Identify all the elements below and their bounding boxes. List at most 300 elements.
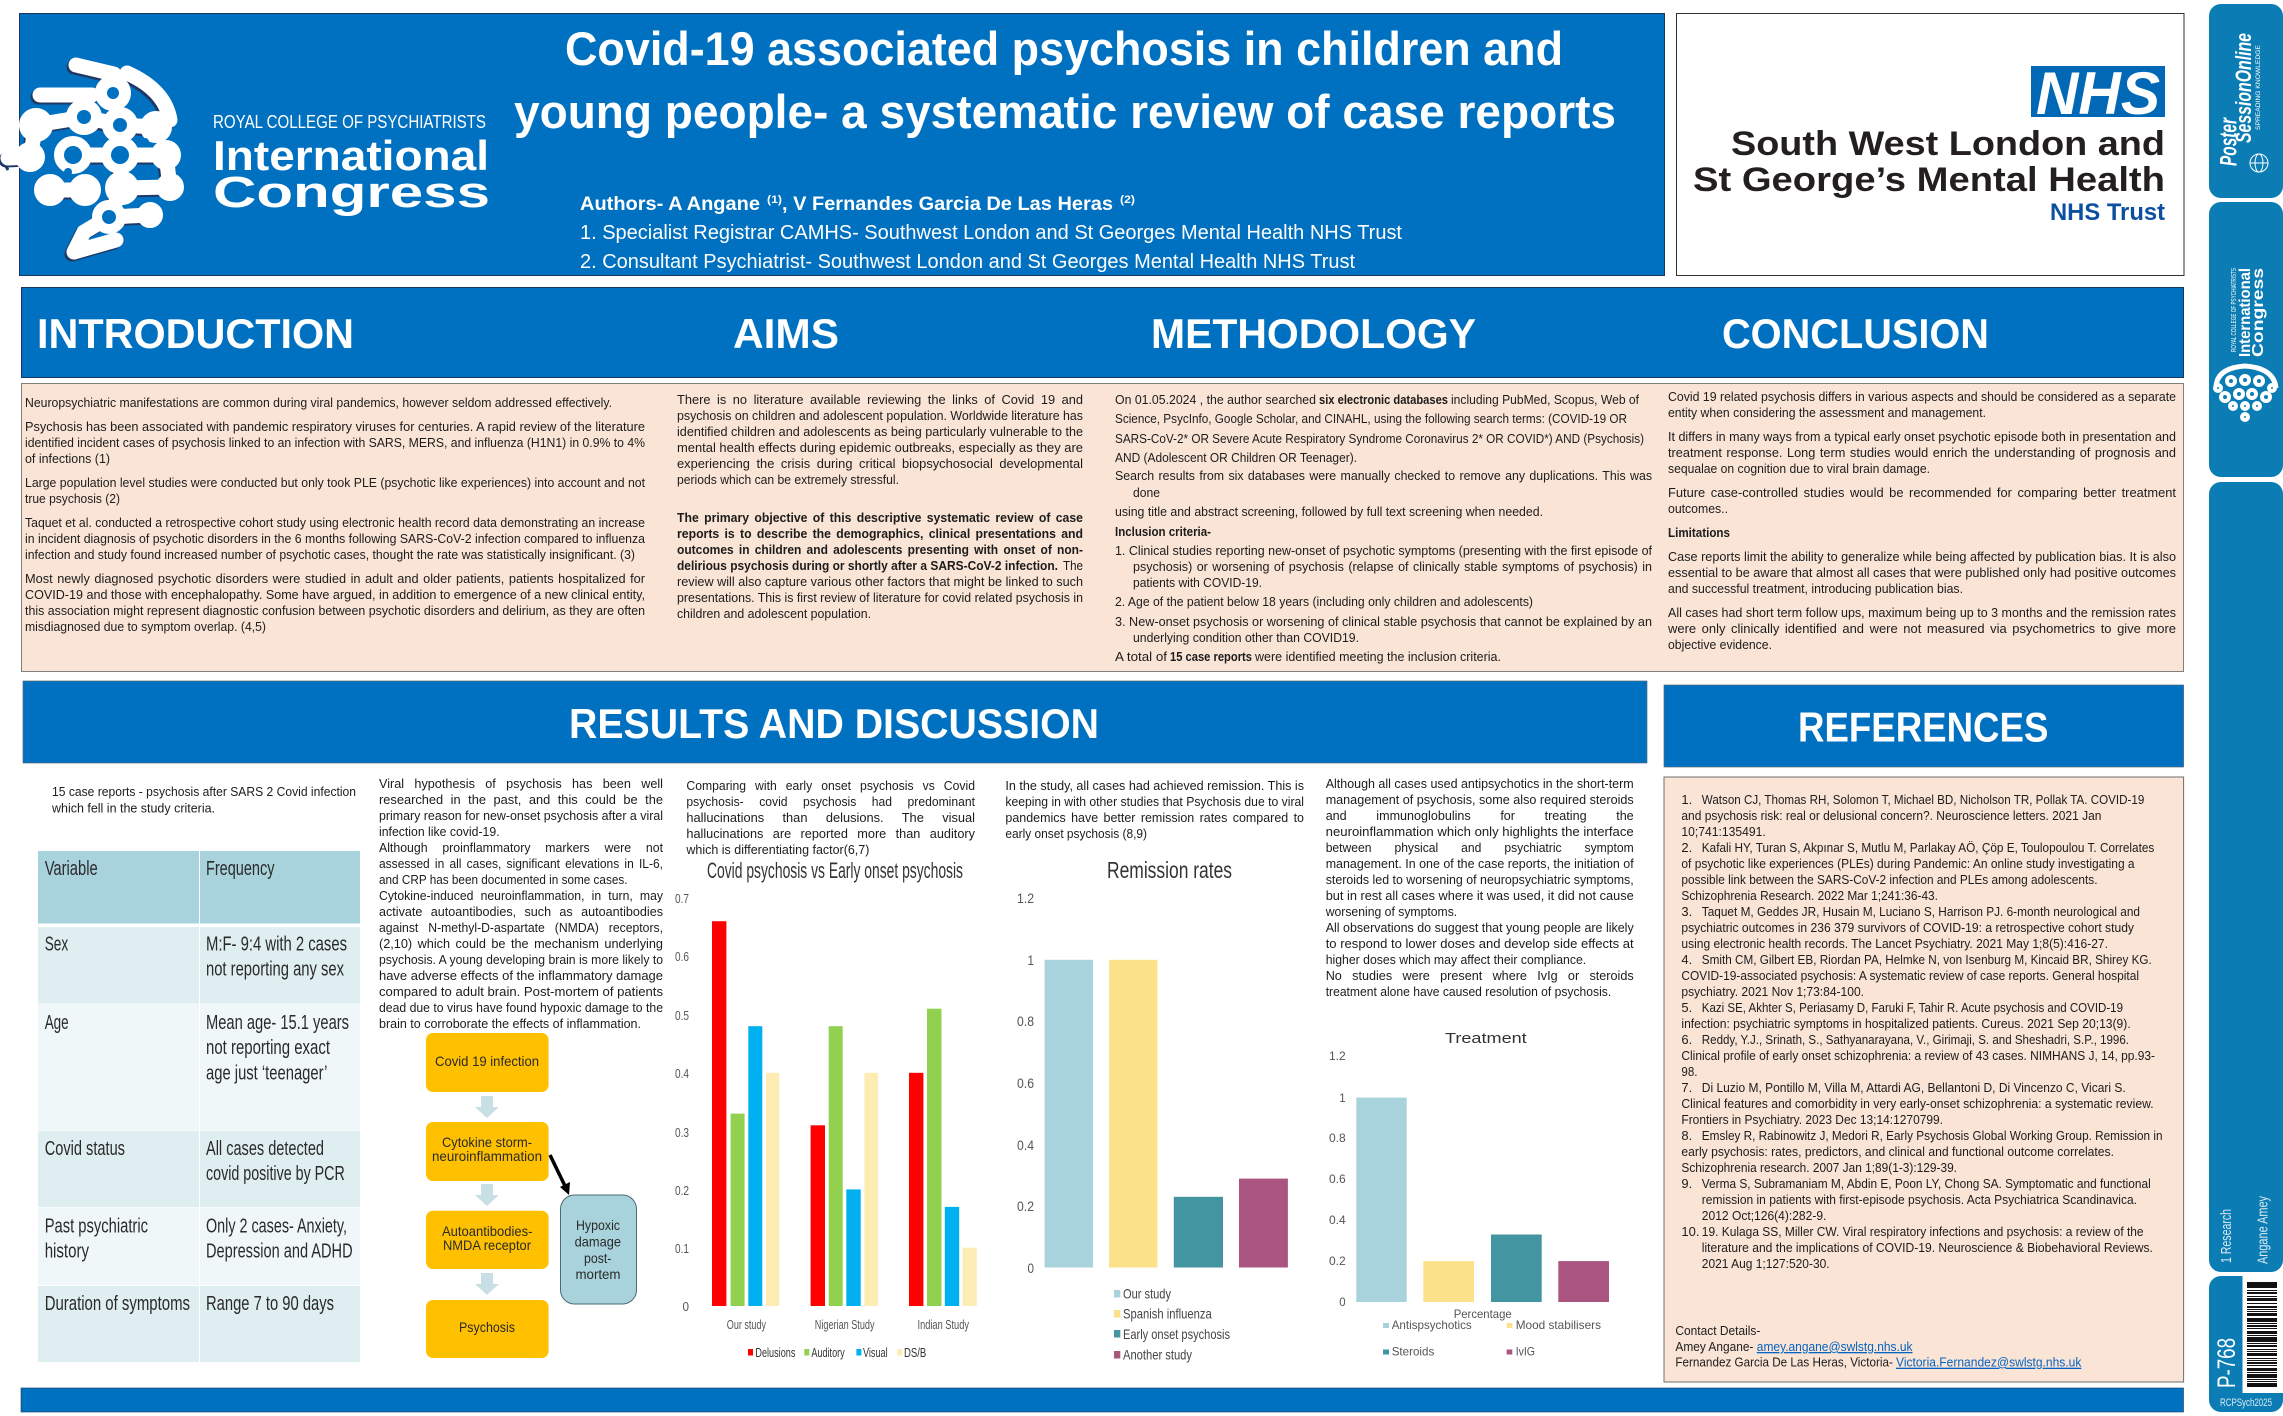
reference list: 3. [1681, 904, 1692, 919]
text: aims: experiencing the crisis during critical biopsychosocial developmental [677, 456, 1083, 471]
table: variable and frequency: Mean age- 15.1 years [206, 1012, 349, 1034]
rotated brand text: SPREADING KNOWLEDGE [2256, 45, 2262, 130]
reference list: Di Luzio M, Pontillo M, Villa M, Attardi AG, Bellantoni D, Di Vincenzo C, Vicari S. [1702, 1080, 2126, 1095]
text: introduction: in incident diagnosis of psychotic disorders in the 6 months following SARS-CoV-2 infection compared to influenza [25, 531, 646, 546]
text: aims: review will also capture various other factors that might be linked to such [677, 574, 1083, 589]
text: remission: pandemics have better remission rates compared to [1005, 810, 1304, 825]
reference list: of psychotic like experiences (PLEs) during Pandemic: An online study investigating a [1681, 856, 2135, 871]
heading bar: results and discussion [23, 681, 1647, 763]
text: viral hypothesis: activate autoantibodies, such as autoantibodies [379, 904, 663, 919]
text: treatment discussion: Although all cases used antipsychotics in the short-term [1326, 776, 1634, 791]
y axis labels: 0.7 [675, 891, 689, 906]
reference list: remission in patients with first-episode psychosis. Acta Psychiatrica Scandinavica. [1702, 1192, 2137, 1207]
text: introduction: this association might represent diagnostic confusion between psychotic disorders and delirium, as they are often [25, 603, 645, 618]
affiliations: 2. Consultant Psychiatrist- Southwest London and St Georges Mental Health NHS Trust [580, 251, 1355, 273]
text: aims: outcomes in children and adolescents presenting with onset of non- [677, 542, 1083, 557]
text: methodology: 2. Age of the patient below 18 years (including only children and adolescents) [1115, 594, 1533, 609]
text: methodology [1115, 392, 1652, 664]
heading bar: references: REFERENCES [1798, 704, 2048, 750]
reference list: Kafali HY, Turan S, Akpınar S, Mutlu M, Parlakay AÖ, Çöp E, Toulopoulou T. Correlates [1702, 840, 2155, 855]
trust name: St George’s Mental Health [1693, 161, 2165, 199]
heading: conclusion: CONCLUSION [1722, 310, 1989, 357]
text: aims: periods which can be extremely stressful. [677, 472, 899, 487]
section heading bar [22, 288, 2184, 378]
text: methodology: On 01.05.2024 , the author searched [1115, 392, 1316, 407]
legend: Spanish influenza [1123, 1306, 1212, 1322]
text: introduction: Most newly diagnosed psychotic disorders were studied in adult and older patients, patients hospitalized for [25, 571, 646, 586]
chart title: Remission rates [1107, 857, 1232, 883]
y axis labels: 1.2 [1329, 1049, 1346, 1063]
contact details: Contact Details- [1675, 1323, 1760, 1338]
legend: Antispsychotics [1392, 1318, 1472, 1332]
box: autoantibodies: Autoantibodies- [442, 1223, 533, 1239]
text: remission: In the study, all cases had achieved remission. This is [1005, 778, 1304, 793]
text: aims: mental health effects during epidemic outbreaks, especially as they are [677, 440, 1083, 455]
legend: Delusions [755, 1345, 796, 1360]
reference list: Taquet M, Geddes JR, Husain M, Luciano S, Harrison PJ. 6-month neurological and [1702, 904, 2140, 919]
reference list: Emsley R, Rabinowitz J, Medori R, Early Psychosis Global Working Group. Remission in [1702, 1128, 2162, 1143]
text: methodology: 3. New-onset psychosis or worsening of clinical stable psychosis that cannot be explained by an [1115, 614, 1652, 629]
reference list: Smith CM, Gilbert EB, Riordan PA, Helmke N, von Isenburg M, Kincaid BR, Shirey KG. [1702, 952, 2152, 967]
reference list: 1. [1681, 792, 1692, 807]
reference list: Schizophrenia research. 2007 Jan 1;89(1-3):129-39. [1681, 1160, 1957, 1175]
y axis labels: 0.8 [1329, 1131, 1346, 1145]
text: introduction: infection and study found increased number of psychotic cases, thought the rate was statistically insignificant. (3) [25, 547, 635, 562]
reference list: psychiatric outcomes in 236 379 survivors of COVID-19: a retrospective cohort study [1681, 920, 2134, 935]
arrow: cytokine to hypoxic damage [550, 1155, 570, 1195]
text: conclusion: sequalae on cognition due to viral brain damage. [1668, 461, 1930, 476]
text: introduction: Large population level studies were conducted but only took PLE (psychotic like experiences) into account and not [25, 475, 645, 490]
table: variable and frequency: All cases detected [206, 1138, 324, 1160]
box: psychosis [426, 1300, 549, 1358]
table: variable and frequency: not reporting exact [206, 1037, 330, 1059]
bars: indian study [909, 1009, 977, 1306]
legend: Mood stabilisers [1516, 1318, 1601, 1332]
rotated brand text: ROYAL COLLEGE OF PSYCHIATRISTS [2231, 268, 2238, 352]
text: conclusion: Future case-controlled studies would be recommended for comparing better treatment [1668, 485, 2176, 500]
legend: Steroids [1392, 1344, 1434, 1358]
arrow: infection to cytokine [475, 1096, 499, 1118]
text: remission: keeping in with other studies that Psychosis due to viral [1005, 794, 1304, 809]
text: introduction: COVID-19 and those with encephalopathy. Some have argued, in addition to emergence of a new clinical entity, [25, 587, 645, 602]
text: viral hypothesis: researched in the past, and this could be the [379, 792, 663, 807]
text: treatment discussion: and immunoglobulins for treating the [1326, 808, 1634, 823]
text: viral hypothesis: Cytokine-induced neuroinflammation, in turn, may [379, 888, 663, 903]
y axis labels: 0.2 [675, 1183, 689, 1198]
table: variable and frequency: Variable [45, 858, 98, 880]
authors: , V Fernandes Garcia De Las Heras [782, 194, 1113, 215]
legend: IvIG [1516, 1344, 1535, 1358]
box: covid 19 infection: Covid 19 infection [435, 1053, 539, 1069]
rotated brand text [2216, 33, 2262, 166]
authors: Authors- A Angane [580, 194, 760, 215]
chart title: Covid psychosis vs Early onset psychosis [707, 858, 963, 883]
box: cytokine storm: Cytokine storm- [442, 1134, 532, 1150]
x axis labels: Indian Study [918, 1317, 969, 1332]
reference list: 10. [1681, 1224, 1699, 1239]
title [514, 22, 1616, 138]
sidebar: international congress tab [2209, 202, 2283, 477]
legend: DS/B [904, 1345, 926, 1360]
text: introduction: Neuropsychiatric manifestations are common during viral pandemics, however seldom addressed effectively. [25, 395, 612, 410]
reference list: 2021 Aug 1;127:520-30. [1702, 1256, 1830, 1271]
logo text: International Congress: ROYAL COLLEGE OF PSYCHIATRISTS [213, 112, 486, 132]
reference list: 7. [1681, 1080, 1692, 1095]
text: conclusion: It differs in many ways from a typical early onset psychotic episode both in presentation and [1668, 429, 2176, 444]
table: variable and frequency [38, 851, 360, 1362]
reference list: early psychosis: rates, predictors, and clinical and functional outcome correlates. [1681, 1144, 2114, 1159]
y axis labels: 0.4 [1017, 1137, 1034, 1153]
y axis labels: 0.5 [675, 1008, 689, 1023]
reference list: Frontiers in Psychiatry. 2023 Dec 13;14:1270799. [1681, 1112, 1943, 1127]
legend [748, 1345, 926, 1360]
category text: 1 Research [2218, 1209, 2235, 1263]
heading bar: references [1664, 685, 2184, 767]
box: psychosis: Psychosis [459, 1319, 515, 1335]
y axis labels: 0.6 [1017, 1075, 1034, 1091]
rotated brand text: International [2237, 268, 2254, 357]
text: viral hypothesis: Although proinflammatory markers were not [379, 840, 663, 855]
reference list: 10;741:135491. [1681, 824, 1766, 839]
y axis labels [675, 891, 689, 1314]
sidebar: poster session online tab [2209, 4, 2283, 198]
text: comparing with early onset psychosis: Comparing with early onset psychosis vs Covid [686, 778, 975, 793]
table: variable and frequency: Duration of symptoms [45, 1293, 190, 1315]
text: viral hypothesis [379, 776, 663, 1031]
text: aims: The primary objective of this descriptive systematic review of case [677, 510, 1083, 525]
text: aims: identified children and adolescents as being particularly vulnerable to the [677, 424, 1083, 439]
text: aims: There is no literature available reviewing the links of Covid 19 and [677, 392, 1083, 407]
reference list: 2. [1681, 840, 1692, 855]
reference list: infection: psychiatric symptoms in hospitalized patients. Cureus. 2021 Sep 20;13(9). [1681, 1016, 2131, 1031]
contact details: Amey Angane- [1675, 1339, 1753, 1354]
logo text: International Congress: Congress [213, 168, 490, 217]
reference list: COVID-19-associated psychosis: A systematic review of case reports. General hospital [1681, 968, 2139, 983]
text: viral hypothesis: (2,10) which could be the mechanism underlying [379, 936, 663, 951]
text: conclusion: Limitations [1668, 525, 1730, 540]
table: variable and frequency: Sex [45, 934, 68, 956]
text: methodology: AND (Adolescent OR Children OR Teenager). [1115, 450, 1357, 465]
text: aims: psychosis on children and adolescent population. Worldwide literature has [677, 408, 1083, 423]
reference list: Watson CJ, Thomas RH, Solomon T, Michael BD, Nicholson TR, Pollak TA. COVID-19 [1702, 792, 2144, 807]
legend: Another study [1123, 1346, 1192, 1362]
authors: (2) [1120, 194, 1135, 206]
reference list: Schizophrenia Research. 2022 Mar 1;241:36-43. [1681, 888, 1938, 903]
text: methodology: were identified meeting the inclusion criteria. [1254, 649, 1501, 664]
logo text: International Congress [213, 112, 490, 217]
box: covid 19 infection [426, 1033, 549, 1092]
text: treatment discussion: worsening of symptoms. [1325, 904, 1457, 919]
text: methodology: psychosis) or worsening of psychosis (relapse of clinically stable symptoms of psychosis) in [1133, 559, 1652, 574]
text: introduction: Psychosis has been associated with pandemic respiratory viruses for centuries. A rapid review of the literature [25, 419, 645, 434]
reference list: Clinical features and comorbidity in very early-onset schizophrenia: a systematic review. [1681, 1096, 2154, 1111]
y axis labels: 0 [682, 1299, 689, 1314]
chart title: Treatment [1445, 1030, 1528, 1047]
reference list [1681, 792, 2162, 1271]
text: conclusion: were only clinically identified and were not measured via psychometrics to give more [1667, 621, 2176, 636]
text: viral hypothesis: infection like covid-19. [379, 824, 500, 839]
text: introduction: misdiagnosed due to symptom overlap. (4,5) [25, 619, 266, 634]
text: methodology: 1. Clinical studies reporting new-onset of psychotic symptoms (presenting with the first episode of [1115, 543, 1652, 558]
text: aims: delirious psychosis during or shortly after a SARS-CoV-2 infection. [677, 558, 1058, 573]
contact details [1675, 1323, 2082, 1370]
sidebar: author and category tab [2209, 482, 2283, 1272]
text: aims: children and adolescent population. [677, 606, 871, 621]
arrow: autoantibodies to psychosis [475, 1273, 499, 1295]
text: aims [677, 392, 1083, 621]
y axis labels: 1 [1339, 1091, 1346, 1105]
contact details: Victoria.Fernandez@swlstg.nhs.uk [1896, 1355, 2082, 1370]
bar chart: treatment [1329, 1030, 1609, 1358]
trust name [1693, 125, 2165, 226]
contact details: amey.angane@swlstg.nhs.uk [1757, 1339, 1913, 1354]
box: hypoxic damage: mortem [576, 1266, 620, 1282]
icon: globe [2250, 154, 2268, 172]
text: treatment discussion: between physical and psychiatric symptom [1326, 840, 1634, 855]
text: introduction: of infections (1) [25, 451, 110, 466]
panel: NHS trust logo [1676, 14, 2184, 276]
table: variable and frequency: Depression and ADHD [206, 1241, 353, 1263]
legend: Our study [1123, 1286, 1171, 1302]
text: conclusion: and successful treatment, introducing publication bias. [1668, 581, 1963, 596]
y axis labels: 0.3 [675, 1125, 689, 1140]
legend: Early onset psychosis [1123, 1326, 1230, 1342]
reference list: Clinical profile of early onset schizophrenia: a review of 43 cases. NIMHANS J, 14, pp.93- [1681, 1048, 2155, 1063]
text: treatment discussion: but in rest all cases where it was used, it did not cause [1326, 888, 1634, 903]
text: introduction [25, 395, 646, 634]
table: variable and frequency: Range 7 to 90 days [206, 1293, 334, 1315]
reference list: 5. [1681, 1000, 1692, 1015]
table: variable and frequency: Past psychiatric [45, 1216, 148, 1238]
table: variable and frequency: Age [45, 1012, 69, 1034]
text: comparing with early onset psychosis [685, 778, 975, 857]
rotated brand text: Congress [2250, 268, 2267, 357]
text: methodology: Search results from six databases were manually checked to remove any duplications. This was [1115, 468, 1652, 483]
box: autoantibodies: NMDA receptor [443, 1237, 531, 1253]
table: variable and frequency: history [45, 1241, 89, 1263]
legend [1114, 1286, 1230, 1362]
table: variable and frequency: Covid status [45, 1138, 125, 1160]
x axis labels: Our study [727, 1317, 766, 1332]
text: methodology: SARS-CoV-2* OR Severe Acute Respiratory Syndrome Coronavirus 2* OR COVID*) AND (Psychosis) [1115, 431, 1644, 446]
footer bar [21, 1388, 2184, 1412]
legend: Visual [863, 1345, 888, 1360]
text: remission [1005, 778, 1304, 841]
heading: introduction: INTRODUCTION [37, 310, 354, 357]
text: treatment discussion: No studies were present where IvIg or steroids [1326, 968, 1634, 983]
bars [1045, 960, 1288, 1268]
text: aims: The [1063, 558, 1083, 573]
reference list: Kazi SE, Akhter S, Periasamy D, Faruki F, Tahir R. Acute psychosis and COVID-19 [1702, 1000, 2123, 1015]
barcode [2247, 1282, 2277, 1387]
poster number: P-768 [2213, 1338, 2241, 1388]
icon: NHS lozenge: NHS [2036, 60, 2160, 127]
legend: Auditory [811, 1345, 845, 1360]
text: aims: reports is to describe the demographics, clinical presentations and [677, 526, 1083, 541]
y axis labels [1329, 1049, 1346, 1309]
reference list: 2012 Oct;126(4):282-9. [1702, 1208, 1826, 1223]
text: viral hypothesis: Viral hypothesis of psychosis has been well [379, 776, 663, 791]
heading: aims: AIMS [733, 310, 839, 357]
authors: (1) [767, 194, 782, 206]
text: methodology: patients with COVID-19. [1133, 575, 1262, 590]
y axis labels: 0.4 [1329, 1213, 1346, 1227]
text: viral hypothesis: have adverse effects of the inflammatory damage [379, 968, 663, 983]
text: methodology: A total of [1115, 649, 1167, 664]
text: viral hypothesis: primary reason for new-onset psychosis after a viral [379, 808, 663, 823]
text: introduction: identified incident cases of psychosis linked to an infection with SARS, MERS, and influenza (H1N1) in 0.9% to 4% [25, 435, 645, 450]
y axis labels: 0.1 [675, 1241, 689, 1256]
text: methodology: six electronic databases [1319, 392, 1448, 407]
text: methodology: Inclusion criteria- [1115, 524, 1211, 539]
reference list: 9. [1681, 1176, 1692, 1191]
text: treatment discussion: management. In one of the case reports, the initiation of [1326, 856, 1634, 871]
reference list: possible link between the SARS-CoV-2 infection and PLEs among adolescents. [1681, 872, 2098, 887]
text: comparing with early onset psychosis: psychosis- covid psychosis had predominant [686, 794, 975, 809]
arrow: cytokine to autoantibodies [475, 1184, 499, 1206]
text: treatment discussion: All observations do suggest that young people are likely [1326, 920, 1634, 935]
rotated brand text [2231, 268, 2267, 357]
intro note: 15 case reports: which fell in the study criteria. [51, 801, 215, 816]
y axis labels: 1.2 [1017, 890, 1034, 906]
text: methodology: using title and abstract screening, followed by full text screening when needed. [1115, 504, 1543, 519]
rotated brand text: Poster [2216, 117, 2242, 166]
text: introduction: true psychosis (2) [25, 491, 120, 506]
y axis labels [1017, 890, 1034, 1276]
y axis labels: 0 [1339, 1295, 1346, 1309]
trust name: South West London and [1731, 125, 2165, 163]
bar chart: covid psychosis vs early onset psychosis [675, 858, 977, 1360]
box: hypoxic damage: damage [575, 1234, 621, 1250]
affiliations [580, 222, 1402, 273]
panel: peach text panel [22, 384, 2184, 672]
trust name: NHS Trust [2050, 199, 2165, 226]
table: variable and frequency: not reporting any sex [206, 959, 344, 981]
sidebar: poster id tab [2209, 1276, 2283, 1412]
text: treatment discussion: to respond to lower doses and develop side effects at [1326, 936, 1634, 951]
header banner [5, 14, 1664, 276]
reference list: 6. [1681, 1032, 1692, 1047]
text: aims: presentations. This is first review of literature for covid related psychosis in [677, 590, 1083, 605]
text: viral hypothesis: against N-methyl-D-aspartate (NMDA) receptors, [379, 920, 663, 935]
box: hypoxic damage [560, 1195, 636, 1304]
bars: our study [712, 921, 779, 1306]
bars [1356, 1098, 1609, 1302]
text: treatment discussion: neuroinflammation which only highlights the interface [1326, 824, 1634, 839]
icon: network globe [2215, 366, 2276, 420]
y axis labels: 0.6 [1329, 1172, 1346, 1186]
box: hypoxic damage: Hypoxic [576, 1217, 620, 1233]
y axis labels: 0.2 [1329, 1254, 1346, 1268]
table: variable and frequency: M:F- 9:4 with 2 cases [206, 934, 347, 956]
title: Covid-19 associated psychosis in children and [565, 22, 1563, 75]
heading bar: results and discussion: RESULTS AND DISCUSSION [569, 700, 1099, 747]
text: treatment discussion [1325, 776, 1634, 999]
affiliations: 1. Specialist Registrar CAMHS- Southwest London and St Georges Mental Health NHS Trust [580, 222, 1402, 244]
bars: nigerian study [811, 1026, 878, 1306]
reference list: literature and the implications of COVID-19. Neuroscience & Biobehavioral Reviews. [1702, 1240, 2153, 1255]
text: methodology: 15 case reports [1170, 649, 1252, 664]
text: introduction: Taquet et al. conducted a retrospective cohort study using electronic health record data demonstrating an increase [25, 515, 645, 530]
text: viral hypothesis: assessed in all cases, significant elevations in IL-6, [379, 856, 663, 871]
box: cytokine storm [426, 1122, 549, 1181]
text: viral hypothesis: psychosis. A young developing brain is more likely to [379, 952, 663, 967]
reference list: 19. Kulaga SS, Miller CW. Viral respiratory infections and psychosis: a review of the [1702, 1224, 2144, 1239]
reference list: Verma S, Subramaniam M, Abdin E, Poon LY, Chong SA. Symptomatic and functional [1702, 1176, 2151, 1191]
table: variable and frequency: age just ‘teenager’ [206, 1062, 327, 1084]
reference list: 98. [1681, 1064, 1698, 1079]
author text: Angane Amey [2254, 1196, 2272, 1264]
text: conclusion: objective evidence. [1668, 637, 1772, 652]
x axis title: Percentage [1454, 1307, 1512, 1321]
text: treatment discussion: higher doses which may affect their compliance. [1326, 952, 1586, 967]
text: comparing with early onset psychosis: which is differentiating factor(6,7) [685, 842, 869, 857]
text: conclusion: entity when considering the assessment and management. [1668, 405, 1986, 420]
text: viral hypothesis: compared to adult brain. Post-mortem of patients [379, 984, 663, 999]
box: cytokine storm: neuroinflammation [432, 1148, 542, 1164]
legend [1383, 1318, 1601, 1358]
y axis labels: 0.4 [675, 1066, 689, 1081]
text: methodology: including PubMed, Scopus, Web of [1451, 392, 1639, 407]
contact details: Fernandez Garcia De Las Heras, Victoria- [1675, 1355, 1893, 1370]
intro note: 15 case reports [51, 784, 356, 816]
text: comparing with early onset psychosis: hallucinations than delusions. The visual [686, 810, 975, 825]
y axis labels: 1 [1028, 952, 1034, 968]
heading: methodology: METHODOLOGY [1151, 310, 1476, 357]
text: conclusion [1667, 389, 2176, 652]
table: variable and frequency: Only 2 cases- Anxiety, [206, 1216, 347, 1238]
x axis labels: Nigerian Study [815, 1317, 875, 1332]
y axis labels: 0 [1028, 1260, 1034, 1276]
bar chart: remission rates [1017, 857, 1288, 1362]
text: conclusion: outcomes.. [1668, 501, 1728, 516]
text: viral hypothesis: brain to corroborate the effects of inflammation. [379, 1016, 641, 1031]
title: young people- a systematic review of case reports [514, 85, 1616, 138]
text: treatment discussion: steroids led to worsening of neuropsychiatric symptoms, [1326, 872, 1634, 887]
reference list: Reddy, Y.J., Srinath, S., Sathyanarayana, V., Girimaji, S. and Sheshadri, S.P., 1996. [1702, 1032, 2129, 1047]
text: treatment discussion: treatment alone have caused resolution of psychosis. [1326, 984, 1611, 999]
text: methodology: underlying condition other than COVID19. [1133, 630, 1359, 645]
reference list: and psychosis risk: real or delusional concern?. Neuroscience letters. 2021 Jan [1681, 808, 2101, 823]
text: viral hypothesis: and CRP has been documented in some cases. [379, 872, 628, 887]
table: variable and frequency: covid positive by PCR [206, 1163, 345, 1185]
text: remission: early onset psychosis (8,9) [1005, 826, 1147, 841]
x axis labels [727, 1317, 969, 1332]
intro note: 15 case reports: 15 case reports - psychosis after SARS 2 Covid infection [52, 784, 356, 799]
y axis labels: 0.2 [1017, 1198, 1034, 1214]
y axis labels: 0.6 [675, 949, 689, 964]
flowchart: pathway to psychosis [426, 1033, 636, 1358]
text: comparing with early onset psychosis: hallucinations are reported more than auditory [686, 826, 975, 841]
text: conclusion: essential to be aware that almost all cases that were published only had positive outcomes [1668, 565, 2176, 580]
table: variable and frequency: Frequency [206, 858, 274, 880]
text: methodology: done [1133, 485, 1160, 500]
text: viral hypothesis: dead due to virus have found hypoxic damage to the [379, 1000, 663, 1015]
y axis labels: 0.8 [1017, 1013, 1034, 1029]
logo: Royal College of Psychiatrists network globe [5, 65, 178, 254]
text: conclusion: Covid 19 related psychosis differs in various aspects and should be considered as a separate [1668, 389, 2176, 404]
text: conclusion: treatment response. Long term studies would enrich the understanding of prognosis and [1668, 445, 2176, 460]
box: autoantibodies [426, 1211, 549, 1269]
reference list: 4. [1681, 952, 1692, 967]
text: methodology: Science, PsycInfo, Google Scholar, and CINAHL, using the following search terms: (COVID-19 OR [1115, 411, 1627, 426]
reference list: 8. [1681, 1128, 1692, 1143]
box: hypoxic damage: post- [584, 1250, 612, 1266]
text: conclusion: Case reports limit the ability to generalize while being affected by publication bias. It is also [1668, 549, 2176, 564]
reference list: using electronic health records. The Lancet Psychiatry. 2021 May 1;8(5):416-27. [1681, 936, 2108, 951]
logo text: International Congress: International [213, 132, 489, 179]
reference list: psychiatry. 2021 Nov 1;73:84-100. [1681, 984, 1864, 999]
